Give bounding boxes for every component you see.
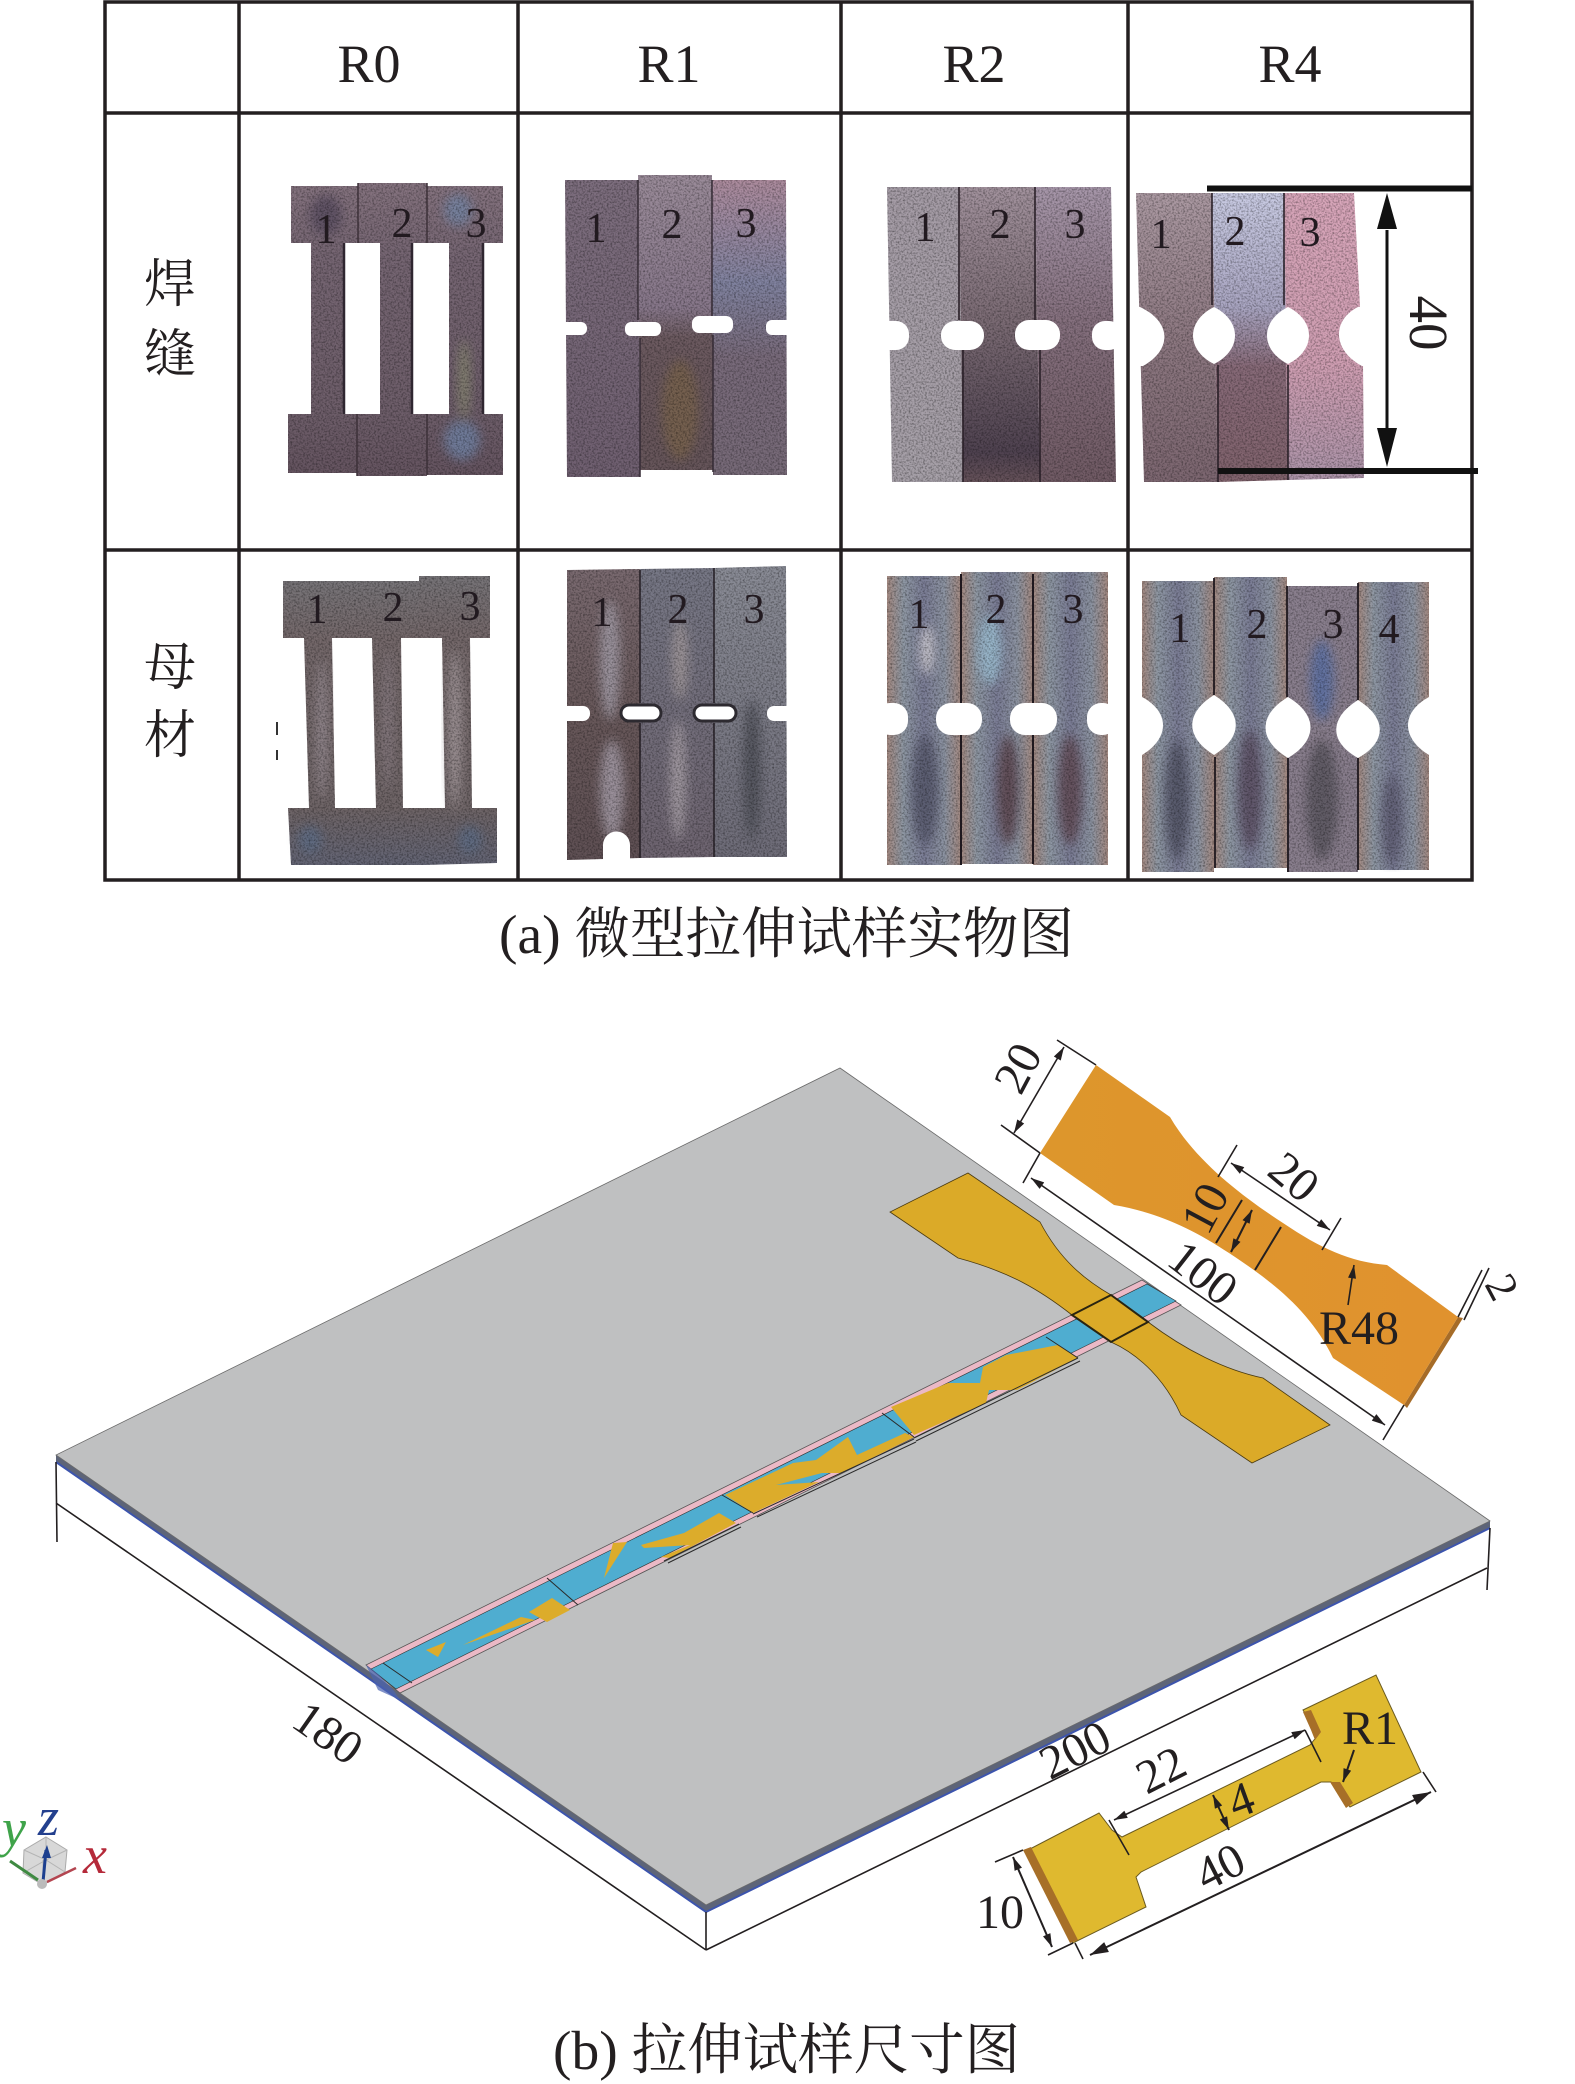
icon: xyz axis triad: z: [37, 1787, 59, 1847]
icon: xyz axis triad: [0, 1787, 107, 1889]
row label: weld: [144, 257, 196, 384]
caption (a): (a) 微型拉伸试样实物图: [499, 905, 1074, 966]
number labels: 3: [1322, 602, 1344, 648]
dimension labels: 10: [1171, 1175, 1240, 1242]
dimension labels: [976, 1702, 1398, 1939]
photo: base metal R0 specimens: [277, 576, 497, 865]
dimension labels: 4: [1221, 1771, 1261, 1829]
column headers: R0: [337, 34, 401, 94]
dimension labels: 10: [976, 1886, 1024, 1939]
column headers: R2: [942, 34, 1006, 94]
number labels: 1: [914, 205, 936, 251]
plate dimensions 180 and 200: 200: [1031, 1710, 1119, 1790]
dimension: 40: 40: [1398, 296, 1459, 350]
photo: base metal R4 specimens: [1130, 577, 1440, 872]
icon: xyz axis triad: x: [82, 1825, 107, 1885]
number labels: 2: [1224, 209, 1246, 255]
dimension labels: R48: [1319, 1302, 1399, 1355]
number labels: 2: [668, 587, 688, 633]
number labels: 1: [908, 592, 930, 638]
number labels: [1150, 209, 1320, 258]
number labels: [908, 587, 1084, 638]
number labels: 2: [986, 587, 1006, 633]
photo: weld R2 specimens: [876, 187, 1122, 482]
number labels: 1: [1170, 606, 1190, 652]
panel: specimen photo table: [105, 2, 1478, 880]
table grid: [105, 2, 1472, 880]
column headers: [337, 34, 1322, 94]
dimension labels: 40: [1187, 1833, 1254, 1902]
number labels: 2: [1246, 602, 1268, 648]
number labels: [1170, 602, 1400, 653]
dimension labels: 22: [1128, 1736, 1195, 1805]
number labels: 3: [744, 587, 764, 633]
yellow specimen on plate: [890, 1173, 1330, 1463]
number labels: 1: [1150, 212, 1172, 258]
number labels: 3: [1300, 210, 1320, 256]
number labels: [586, 201, 756, 252]
dimension labels: R1: [1342, 1702, 1398, 1755]
orange specimen detail: [984, 1035, 1529, 1440]
number labels: 2: [662, 202, 682, 248]
photo: weld R1 specimens: [555, 175, 796, 477]
weld strip: [366, 1280, 1181, 1700]
dimension labels: 20: [984, 1035, 1053, 1102]
dimension lines: [1001, 1040, 1489, 1440]
dimension labels: [984, 1035, 1529, 1355]
column headers: R4: [1258, 34, 1322, 94]
row label: base metal: [144, 640, 196, 765]
weld strip yellow fracture regions: [426, 1345, 1078, 1657]
number labels: 3: [1062, 587, 1084, 633]
panel: plate dimension drawing: [0, 1035, 1529, 1959]
dimension labels: 2: [1475, 1266, 1529, 1308]
number labels: [914, 202, 1086, 251]
photo: weld R4 specimens: [1125, 193, 1375, 482]
number labels: [306, 584, 480, 633]
number labels: 3: [466, 201, 486, 247]
plate top surface: [56, 1068, 1490, 1905]
small tensile specimen detail: [976, 1675, 1436, 1959]
number labels: 1: [306, 587, 328, 633]
number labels: 3: [736, 201, 756, 247]
dimension lines: [995, 1730, 1436, 1959]
plate dimensions 180 and 200: 180: [283, 1691, 372, 1776]
icon: xyz axis triad: y: [0, 1798, 26, 1858]
number labels: 2: [990, 202, 1010, 248]
number labels: 3: [460, 584, 480, 630]
number labels: [592, 587, 764, 636]
row label: weld: 焊: [144, 257, 196, 314]
number labels: 1: [316, 207, 336, 253]
weld strip specimen outlines: [383, 1337, 1080, 1683]
number labels: 2: [392, 201, 412, 247]
row label: weld: 缝: [144, 327, 196, 384]
row label: base metal: 母: [144, 640, 196, 697]
number labels: 3: [1064, 202, 1086, 248]
number labels: 4: [1378, 607, 1400, 653]
dimension labels: 100: [1158, 1230, 1247, 1316]
caption (b): (b) 拉伸试样尺寸图: [553, 2021, 1020, 2082]
photo: weld R0 specimens: [288, 183, 503, 476]
photo: base metal R1 specimens: [555, 566, 797, 862]
dimension labels: 20: [1258, 1142, 1329, 1213]
number labels: [316, 201, 486, 253]
column headers: R1: [637, 34, 701, 94]
dimension: 40: [1207, 188, 1478, 471]
photo: base metal R2 specimens: [876, 572, 1117, 865]
plate dimensions 180 and 200: [56, 1462, 1490, 1950]
number labels: 1: [586, 206, 606, 252]
plate side edges: [56, 1455, 1490, 1912]
number labels: 2: [382, 585, 404, 631]
number labels: 1: [592, 590, 612, 636]
row label: base metal: 材: [144, 708, 196, 765]
